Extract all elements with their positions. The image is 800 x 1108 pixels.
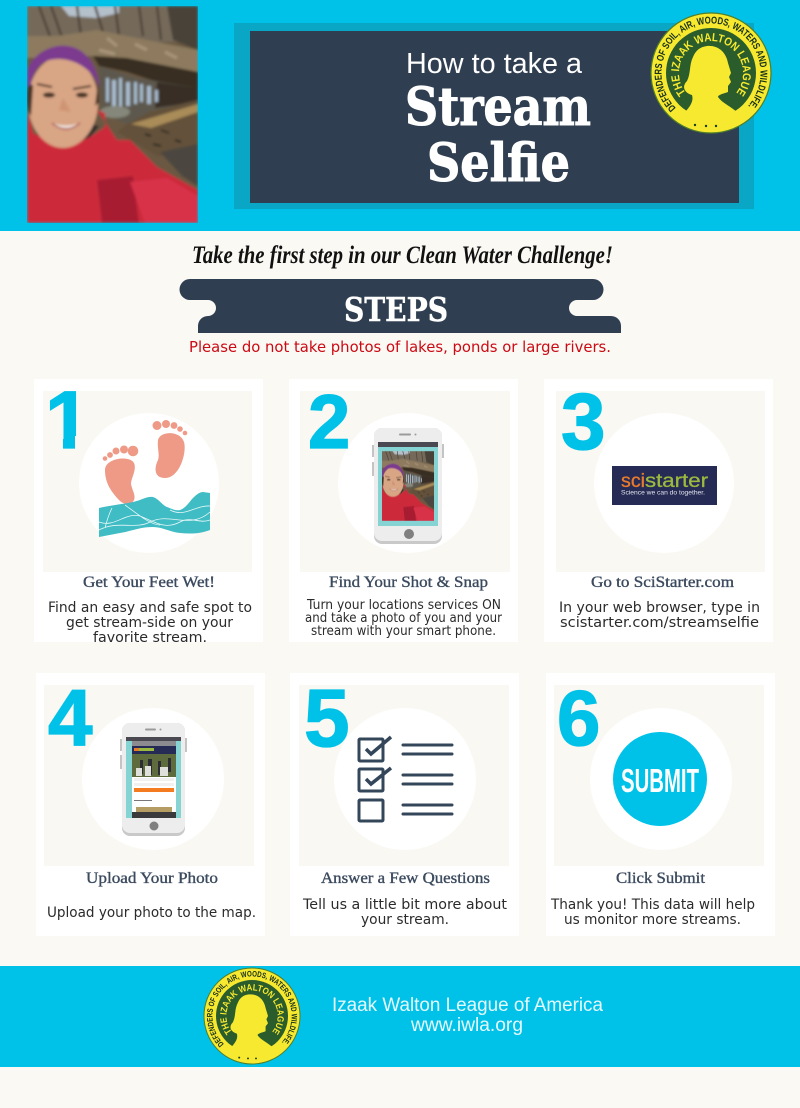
icon: checklist bbox=[359, 737, 452, 821]
tagline: Take the first step in our Clean Water Challenge! bbox=[192, 242, 613, 269]
icon: phone with scistarter page bbox=[120, 723, 187, 836]
logo: footer seal: DEFENDERS OF SOIL, AIR, WOODS, WATERS AND WILDLIFE. bbox=[206, 970, 298, 1048]
logo: footer seal: THE IZAAK WALTON LEAGUE bbox=[220, 984, 284, 1036]
step 4 title: Upload Your Photo bbox=[86, 870, 218, 887]
icon: phone with selfie bbox=[372, 428, 444, 544]
logo: Izaak Walton League seal: DEFENDERS OF SOIL, AIR, WOODS, WATERS AND WILDLIFE. bbox=[654, 16, 768, 112]
step 2 body: and take a photo of you and your bbox=[305, 611, 503, 626]
logo: scistarter: sci bbox=[621, 471, 645, 492]
step 2 body: stream with your smart phone. bbox=[311, 624, 496, 639]
step number 3: 3 bbox=[561, 377, 606, 466]
step number 1: 1 bbox=[45, 375, 91, 466]
step 5 title: Answer a Few Questions bbox=[321, 870, 490, 887]
header band bbox=[0, 0, 800, 231]
step 3 body: scistarter.com/streamselfie bbox=[560, 615, 759, 631]
footer url: www.iwla.org bbox=[410, 1015, 523, 1036]
step 3 body bbox=[559, 600, 760, 631]
icon: submit button bbox=[613, 732, 707, 826]
logo: scistarter: starter bbox=[645, 471, 709, 492]
step 6 title: Click Submit bbox=[616, 870, 706, 887]
panel: step 6 bbox=[546, 673, 775, 936]
step 6 body: Thank you! This data will help bbox=[550, 897, 755, 913]
step 1 body: Find an easy and safe spot to bbox=[48, 600, 252, 616]
steps banner bbox=[180, 279, 621, 333]
panel: step 5 bbox=[290, 673, 519, 936]
step 1 body: get stream-side on your bbox=[66, 615, 233, 631]
step 1 body: favorite stream. bbox=[93, 630, 207, 646]
logo: Izaak Walton League seal: THE IZAAK WALTON LEAGUE bbox=[671, 33, 751, 98]
title block bbox=[234, 23, 754, 209]
step 2 title: Find Your Shot & Snap bbox=[329, 574, 488, 591]
step 5 body bbox=[302, 897, 508, 928]
step 5 body: Tell us a little bit more about bbox=[302, 897, 508, 913]
step 5 body: your stream. bbox=[361, 912, 449, 928]
photo: stream selfie bbox=[27, 6, 198, 223]
icon: submit button: SUBMIT bbox=[621, 762, 699, 799]
footer band bbox=[0, 966, 800, 1067]
icon: footprints and water bbox=[99, 420, 210, 537]
step 2 body: Turn your locations services ON bbox=[306, 598, 501, 613]
panel: step 3 bbox=[544, 377, 773, 642]
step 4 body: Upload your photo to the map. bbox=[47, 905, 256, 921]
step 6 body: us monitor more streams. bbox=[564, 912, 741, 928]
warning note: Please do not take photos of lakes, ponds or large rivers. bbox=[189, 338, 611, 356]
step number 6: 6 bbox=[557, 674, 600, 762]
step number 2: 2 bbox=[308, 380, 350, 465]
step 1 body bbox=[48, 600, 252, 646]
title line: selfie: Selfie bbox=[427, 133, 570, 194]
step 1 title: Get Your Feet Wet! bbox=[83, 574, 215, 591]
footer organisation name: Izaak Walton League of America bbox=[332, 995, 603, 1016]
step number 4: 4 bbox=[48, 673, 93, 762]
banner heading: STEPS bbox=[344, 290, 448, 329]
title line: stream: Stream bbox=[405, 77, 591, 138]
panel: step 2 bbox=[289, 379, 518, 642]
step 2 body bbox=[305, 598, 503, 639]
step number 5: 5 bbox=[304, 673, 350, 764]
logo: scistarter bbox=[612, 466, 717, 505]
logo: scistarter: Science we can do together. bbox=[621, 490, 705, 496]
panel: step 1 bbox=[34, 375, 263, 646]
step 6 body bbox=[550, 897, 755, 928]
step 3 body: In your web browser, type in bbox=[559, 600, 760, 616]
step 3 title: Go to SciStarter.com bbox=[591, 574, 734, 591]
title line: how to take a: How to take a bbox=[406, 48, 583, 80]
panel: step 4 bbox=[36, 673, 265, 936]
